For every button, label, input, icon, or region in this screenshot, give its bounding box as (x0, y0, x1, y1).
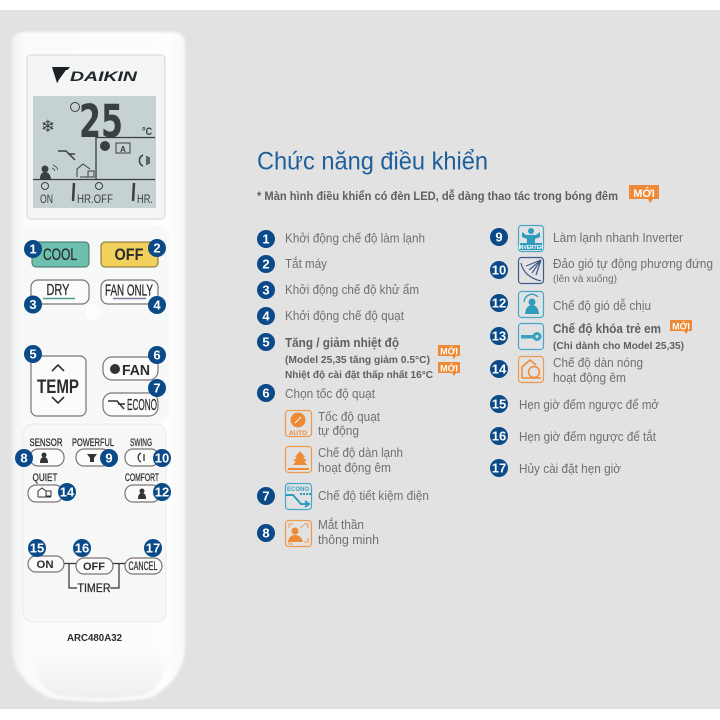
item 16: Hẹn giờ đếm ngược để tắt (519, 429, 656, 444)
item 3: Khởi động chế độ khử ẩm (285, 282, 419, 297)
icon: intelligent eye (286, 520, 312, 546)
button: on: ON (36, 559, 54, 571)
button: dry (31, 280, 89, 304)
new tag: model step: MỚI (440, 346, 458, 356)
remote control (12, 32, 185, 702)
remote number badges: 7 (153, 380, 161, 396)
button: timer off: OFF (83, 561, 105, 573)
remote number badges: 8 (20, 450, 28, 466)
remote number badges: 3 (29, 297, 37, 312)
item 10: (lên và xuống) (553, 273, 617, 285)
button: comfort (125, 485, 160, 502)
item 12 (490, 292, 651, 318)
remote number badges: 5 (29, 346, 37, 362)
lcd timer text: HR.OFF (77, 192, 113, 206)
item 8 (257, 517, 379, 547)
button: fan only (101, 280, 158, 304)
remote number badges: 15 (30, 540, 44, 556)
lcd timer text: HR. (137, 192, 153, 206)
item 10: 10 (492, 262, 506, 278)
remote number badges: 4 (153, 298, 161, 312)
item 2: Tắt máy (285, 256, 327, 271)
item 13 (490, 322, 684, 352)
item 6 (257, 384, 375, 402)
new tag: minimum temperature (438, 362, 460, 376)
item 4: 4 (262, 308, 270, 324)
button labels: COMFORT (125, 472, 159, 484)
item 12: Chế độ gió dễ chịu (553, 298, 651, 313)
remote number badges: 9 (105, 450, 113, 466)
remote body (12, 32, 185, 702)
icon: auto fan (286, 410, 312, 437)
lcd timer text (40, 182, 153, 206)
new tag: subtitle (629, 185, 659, 203)
button: quiet (28, 485, 63, 502)
lcd screen (33, 95, 156, 208)
item 15 (490, 395, 659, 413)
item 17: Hủy cài đặt hẹn giờ (519, 461, 621, 476)
auto fan text: tự động (318, 423, 359, 438)
button: econo: ECONO (127, 397, 157, 414)
item 1 (257, 230, 425, 248)
lcd timer text: ON (40, 192, 53, 206)
quiet indoor text: hoạt động êm (318, 460, 391, 475)
item 13: (Chỉ dành cho Model 25,35) (553, 340, 684, 352)
lower button panel (23, 424, 166, 622)
remote number badges: 17 (146, 540, 160, 556)
remote number badges: 6 (153, 348, 161, 362)
item 14: hoạt động êm (553, 370, 626, 385)
button: cancel (125, 558, 162, 574)
item 12: 12 (492, 296, 506, 310)
icon: vertical swing (518, 258, 544, 284)
item 8: thông minh (318, 532, 379, 547)
lcd sensor person (40, 165, 58, 179)
remote foot shading (30, 650, 170, 698)
list: right column (490, 226, 713, 477)
item 16 (490, 427, 656, 445)
button: swing (125, 449, 159, 466)
lcd screen: °C (142, 126, 152, 138)
item 3: 3 (262, 282, 270, 298)
new tag: child lock (670, 320, 692, 334)
icon: comfort airflow (518, 292, 544, 318)
item 5 (257, 333, 433, 381)
button: off: OFF (114, 245, 144, 264)
item 14: 14 (492, 362, 507, 376)
daikin logo: DAIKIN (70, 68, 138, 84)
lcd quiet house (77, 164, 94, 177)
button: timer off (76, 558, 113, 574)
quiet indoor text (318, 445, 403, 475)
button: off (101, 242, 158, 267)
icon: quiet indoor (286, 446, 312, 472)
item 15: Hẹn giờ đếm ngược để mở (519, 397, 659, 412)
button: fan only: FAN ONLY (105, 282, 153, 300)
item 9 (490, 226, 684, 252)
lcd econo (58, 151, 75, 160)
timer bracket (64, 564, 125, 588)
item 1: Khởi động chế độ làm lạnh (285, 230, 425, 246)
button: fan (103, 357, 158, 380)
item 1: 1 (262, 232, 270, 246)
item 3 (257, 281, 419, 299)
daikin logo (52, 67, 138, 84)
button: cool (32, 242, 89, 267)
button labels: SENSOR (30, 437, 63, 449)
item 7: 7 (262, 488, 270, 504)
item 10 (490, 256, 713, 285)
icon: inverter (518, 226, 544, 252)
model number: ARC480A32 (67, 632, 122, 644)
button: powerful (76, 449, 110, 466)
icon: child lock key (518, 324, 544, 350)
new tag: model step (438, 345, 460, 359)
new tag: child lock: MỚI (672, 320, 690, 332)
remote number badges (15, 239, 171, 557)
button: cool: COOL (43, 245, 77, 264)
button labels (30, 437, 159, 484)
lcd dividers (33, 138, 155, 180)
button: cancel: CANCEL (128, 559, 158, 573)
item 5: Tăng / giảm nhiệt độ (285, 336, 399, 350)
icon: quiet outdoor (518, 356, 544, 382)
title: Chức năng điều khiển (257, 148, 488, 176)
remote number badges: 14 (60, 484, 75, 500)
item 6: 6 (262, 386, 270, 400)
item 14 (490, 355, 643, 385)
icon: inverter: INVERTER (518, 245, 544, 251)
display housing (27, 55, 165, 219)
item 17 (490, 459, 621, 477)
timer label: TIMER (78, 581, 111, 595)
button: temp: TEMP (37, 377, 79, 398)
icon: auto fan: AUTO (289, 430, 307, 437)
button: econo (103, 393, 158, 416)
remote number badges: 16 (75, 540, 89, 556)
item 14: Chế độ dàn nóng (553, 355, 643, 370)
button: temp (31, 356, 86, 416)
remote number badges: 2 (153, 240, 161, 256)
item 13: 13 (492, 328, 506, 344)
auto fan text: Tốc độ quạt (318, 409, 380, 424)
icon: econo (286, 484, 312, 510)
lcd snowflake: ❄ (41, 117, 55, 137)
item 9: 9 (495, 230, 503, 244)
auto fan text (318, 409, 380, 438)
item 5: Nhiệt độ cài đặt thấp nhất 16°C (285, 369, 433, 381)
button: dry: DRY (46, 282, 70, 299)
button: fan: FAN (122, 362, 150, 379)
item 6: Chọn tốc độ quạt (285, 386, 375, 401)
lcd power mark (70, 102, 80, 112)
lcd swing (139, 155, 149, 166)
button labels: SWING (130, 437, 152, 449)
item 8: Mắt thần (318, 517, 364, 532)
center dimple (85, 304, 101, 320)
item 5: (Model 25,35 tăng giảm 0.5°C) (285, 354, 430, 366)
remote number badges: 1 (29, 242, 37, 256)
item 7: Chế độ tiết kiệm điện (318, 488, 429, 503)
item 17: 17 (492, 460, 506, 476)
item 7 (257, 484, 429, 510)
remote number badges: 12 (155, 484, 169, 500)
new tag: minimum temperature: MỚI (440, 362, 458, 374)
item 13: Chế độ khóa trẻ em (553, 322, 661, 336)
item 2: 2 (262, 256, 270, 272)
item 4 (257, 307, 404, 325)
list: left column (257, 230, 460, 547)
quiet indoor text: Chế độ dàn lạnh (318, 445, 403, 460)
item 15: 15 (492, 396, 506, 412)
item 5: 5 (262, 334, 270, 350)
item 2 (257, 255, 327, 273)
new tag: subtitle: MỚI (633, 187, 655, 200)
item 4: Khởi động chế độ quạt (285, 308, 404, 323)
button panel recess (23, 226, 169, 422)
button labels: QUIET (32, 472, 58, 484)
button labels: POWERFUL (72, 437, 114, 449)
remote number badges: 10 (155, 450, 169, 466)
subtitle note: * Màn hình điều khiển có đèn LED, dễ dàng thao tác trong bóng đêm (257, 190, 618, 203)
item 9: Làm lạnh nhanh Inverter (553, 230, 684, 245)
icon: econo: ECONO (287, 487, 309, 493)
item 16: 16 (492, 428, 506, 444)
item 8: 8 (262, 526, 270, 540)
lcd fan and auto: A (120, 145, 126, 154)
button: on (28, 556, 64, 572)
lcd temperature: 25 (79, 95, 123, 148)
button: sensor (30, 449, 64, 466)
